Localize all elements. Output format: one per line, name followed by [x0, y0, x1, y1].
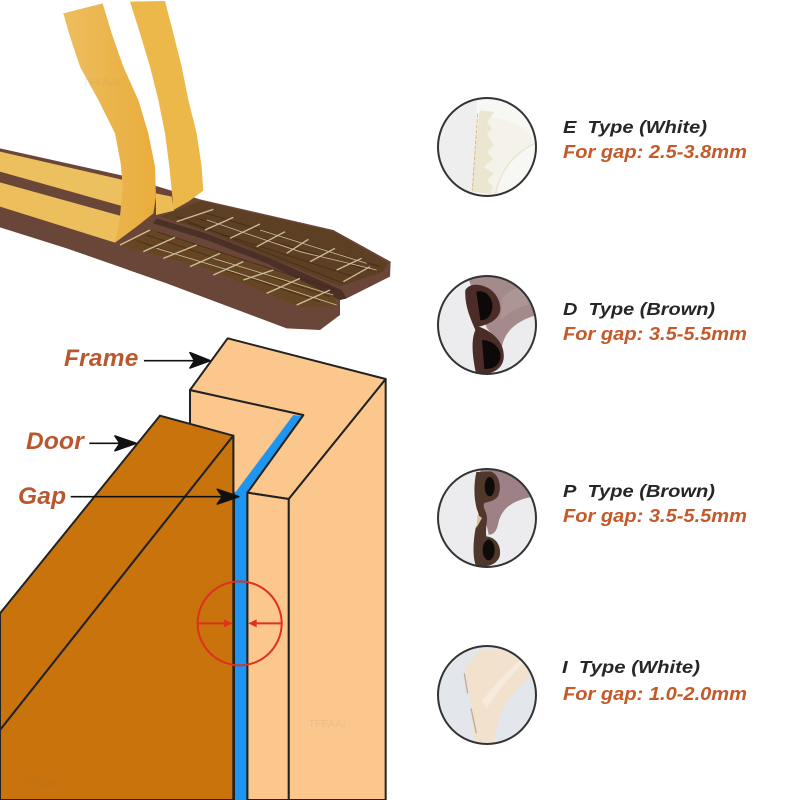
brown foam strip body	[0, 148, 391, 330]
gap edge lines	[234, 415, 303, 800]
blue gap channel	[234, 415, 302, 800]
photo: adhesive foam seal strips with peeled backing	[0, 1, 391, 330]
exposed adhesive face of right strip	[160, 201, 388, 287]
E type name: E Type (White)	[563, 117, 707, 137]
watermark: TFFAAI	[83, 77, 120, 89]
I type name: I Type (White)	[562, 657, 700, 677]
flat backing tape, left strip	[0, 182, 123, 243]
icon: I type cross-section	[437, 645, 537, 745]
panel: P type seal	[437, 468, 747, 568]
icon: D type cross-section	[437, 275, 537, 375]
label: Gap: Gap	[18, 483, 66, 510]
D type gap range: For gap: 3.5-5.5mm	[563, 324, 747, 344]
frame pointer arrow	[144, 353, 210, 368]
adhesive grid lines	[120, 209, 377, 305]
adhesive fine stripes	[137, 213, 380, 302]
panel: E type seal	[437, 97, 747, 197]
watermark front: TFFAAI	[308, 718, 346, 730]
flat backing tape, right strip	[0, 152, 124, 207]
door pointer arrow	[89, 436, 136, 451]
I type gap range: For gap: 1.0-2.0mm	[563, 684, 747, 704]
icon: E type cross-section	[437, 97, 537, 197]
frame front face	[247, 493, 289, 800]
door top face	[0, 416, 233, 730]
icon: P type cross-section	[437, 468, 537, 568]
frame inner return	[190, 390, 303, 493]
E type gap range: For gap: 2.5-3.8mm	[563, 142, 747, 162]
groove between strips	[153, 218, 347, 300]
label: Door: Door	[26, 428, 85, 455]
gap pointer arrow	[71, 489, 239, 504]
frame top face	[190, 338, 386, 499]
panel: I type seal	[437, 645, 747, 745]
door front face	[0, 436, 233, 800]
peeled tape band, left	[63, 3, 156, 243]
label: Frame: Frame	[64, 345, 139, 372]
frame right side	[289, 379, 386, 800]
red gap measure circle	[198, 581, 282, 665]
exposed adhesive face of left strip	[118, 229, 340, 307]
door and frame diagram	[0, 338, 386, 800]
P type gap range: For gap: 3.5-5.5mm	[563, 506, 747, 526]
watermark: door lower left: TFFAAI	[20, 778, 57, 790]
panel: D type seal	[437, 275, 747, 375]
red arrowheads	[224, 619, 257, 627]
peeled tape band, right	[130, 1, 203, 210]
small flat tape piece	[156, 193, 174, 215]
D type name: D Type (Brown)	[563, 299, 715, 319]
P type name: P Type (Brown)	[563, 481, 715, 501]
